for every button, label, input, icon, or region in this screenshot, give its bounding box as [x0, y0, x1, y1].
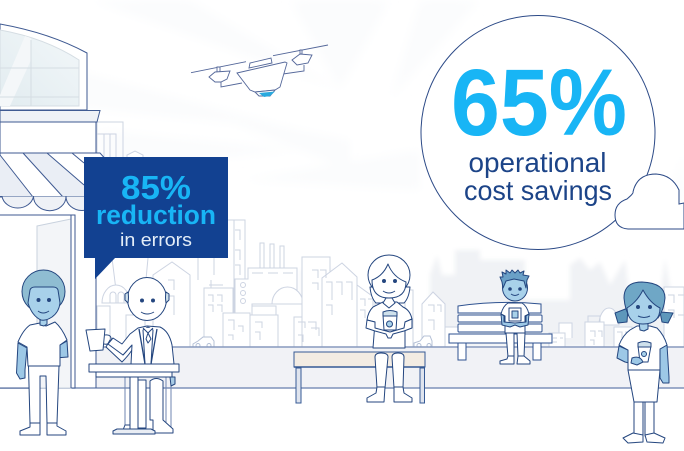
bench: rear bench	[449, 302, 552, 360]
shop wall	[0, 122, 96, 153]
distant skyline silhouette	[250, 250, 684, 347]
person: standing boy	[16, 270, 68, 435]
wall and pavement	[0, 347, 684, 388]
shop awning	[0, 153, 120, 211]
shop building	[0, 24, 120, 388]
stat: 65%: 65%	[451, 50, 627, 156]
stat: 85%: 85%	[121, 169, 191, 206]
shop roof and window	[0, 24, 87, 110]
stat label: operational: operational	[468, 147, 606, 178]
person: seated boy with tablet	[500, 270, 530, 364]
person: seated man with cup at table	[86, 278, 179, 434]
stat label: reduction: reduction	[96, 200, 216, 230]
coffee cup	[86, 329, 105, 351]
coffee cup	[383, 315, 397, 330]
shop cornice	[0, 110, 100, 122]
person: standing girl with coffee	[615, 282, 673, 443]
cityscape outlines	[97, 122, 684, 347]
stat label: in errors: in errors	[120, 230, 192, 250]
shop door	[0, 200, 96, 388]
background sun rays	[0, 0, 684, 230]
icon: cars	[193, 336, 432, 348]
icon: cloud	[615, 174, 684, 229]
person: seated girl with coffee	[366, 255, 412, 402]
callout: 85% reduction in errors	[84, 157, 228, 279]
stat label: cost savings: cost savings	[464, 175, 612, 206]
bench: front bench	[294, 352, 425, 403]
circle: 65% operational cost savings	[421, 16, 655, 250]
drone camera	[259, 92, 275, 97]
building window ticks	[168, 230, 684, 345]
coffee cup	[638, 346, 651, 362]
drone	[191, 45, 328, 97]
